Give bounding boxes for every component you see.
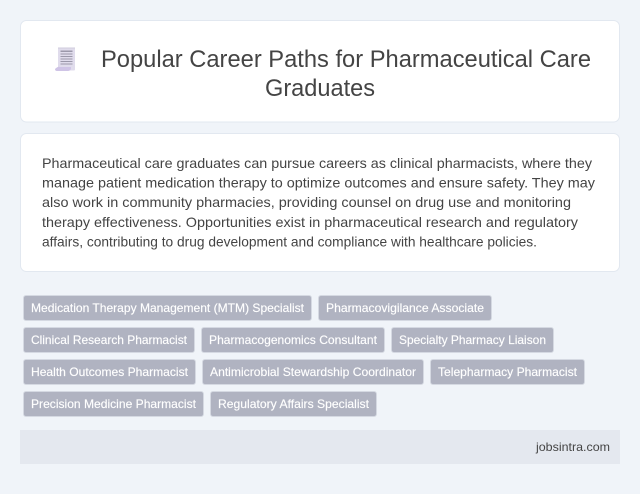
tag: specialty pharmacy bbox=[392, 328, 554, 352]
footer text: jobsintra.com bbox=[535, 440, 610, 454]
tag: pharmacovigilance: Pharmacovigilance Associate bbox=[326, 301, 484, 315]
title bbox=[101, 46, 591, 102]
tag: clinical research bbox=[24, 328, 194, 352]
tag: regulatory affairs: Regulatory Affairs Specialist bbox=[218, 397, 370, 411]
tag: antimicrobial: Antimicrobial Stewardship Coordinator bbox=[210, 365, 416, 379]
text block: description: manage patient medication therapy to optimize outcomes and ensure safety. They may bbox=[42, 174, 595, 190]
text block: description: therapy effectiveness. Opportunities exist in pharmaceutical research and regulatory bbox=[42, 214, 578, 230]
title: Popular Career Paths for Pharmaceutical Care bbox=[101, 46, 591, 73]
panel: header bbox=[20, 20, 620, 122]
tag: antimicrobial bbox=[202, 360, 424, 384]
text block: description: affairs, contributing to drug development and compliance with healthcare policies. bbox=[42, 234, 537, 250]
tag: telepharmacy: Telepharmacy Pharmacist bbox=[438, 365, 578, 379]
text block: description: also work in community pharmacies, providing counsel on drug use and monitoring bbox=[42, 194, 571, 210]
icon: document scroll bbox=[55, 48, 75, 71]
tag: specialty pharmacy: Specialty Pharmacy Liaison bbox=[399, 333, 546, 347]
tag: MTM specialist: Medication Therapy Management (MTM) Specialist bbox=[31, 301, 305, 315]
tag: precision medicine bbox=[24, 392, 204, 416]
panel: description bbox=[20, 134, 620, 272]
tag: clinical research: Clinical Research Pharmacist bbox=[31, 333, 188, 347]
tag: precision medicine: Precision Medicine Pharmacist bbox=[31, 397, 197, 411]
text block: description: Pharmaceutical care graduates can pursue careers as clinical pharmacists, where they bbox=[42, 155, 592, 171]
tag: pharmacogenomics: Pharmacogenomics Consultant bbox=[209, 333, 378, 347]
tag: regulatory affairs bbox=[210, 392, 376, 416]
tag: MTM specialist bbox=[24, 296, 312, 320]
text block: description bbox=[42, 155, 595, 250]
title: Graduates bbox=[265, 75, 375, 102]
tag: health outcomes bbox=[24, 360, 196, 384]
tags: career paths bbox=[24, 296, 584, 416]
tag: pharmacogenomics bbox=[202, 328, 384, 352]
tag: telepharmacy bbox=[430, 360, 584, 384]
tag: pharmacovigilance bbox=[318, 296, 492, 320]
footer bbox=[20, 430, 620, 464]
tag: health outcomes: Health Outcomes Pharmacist bbox=[31, 365, 189, 379]
